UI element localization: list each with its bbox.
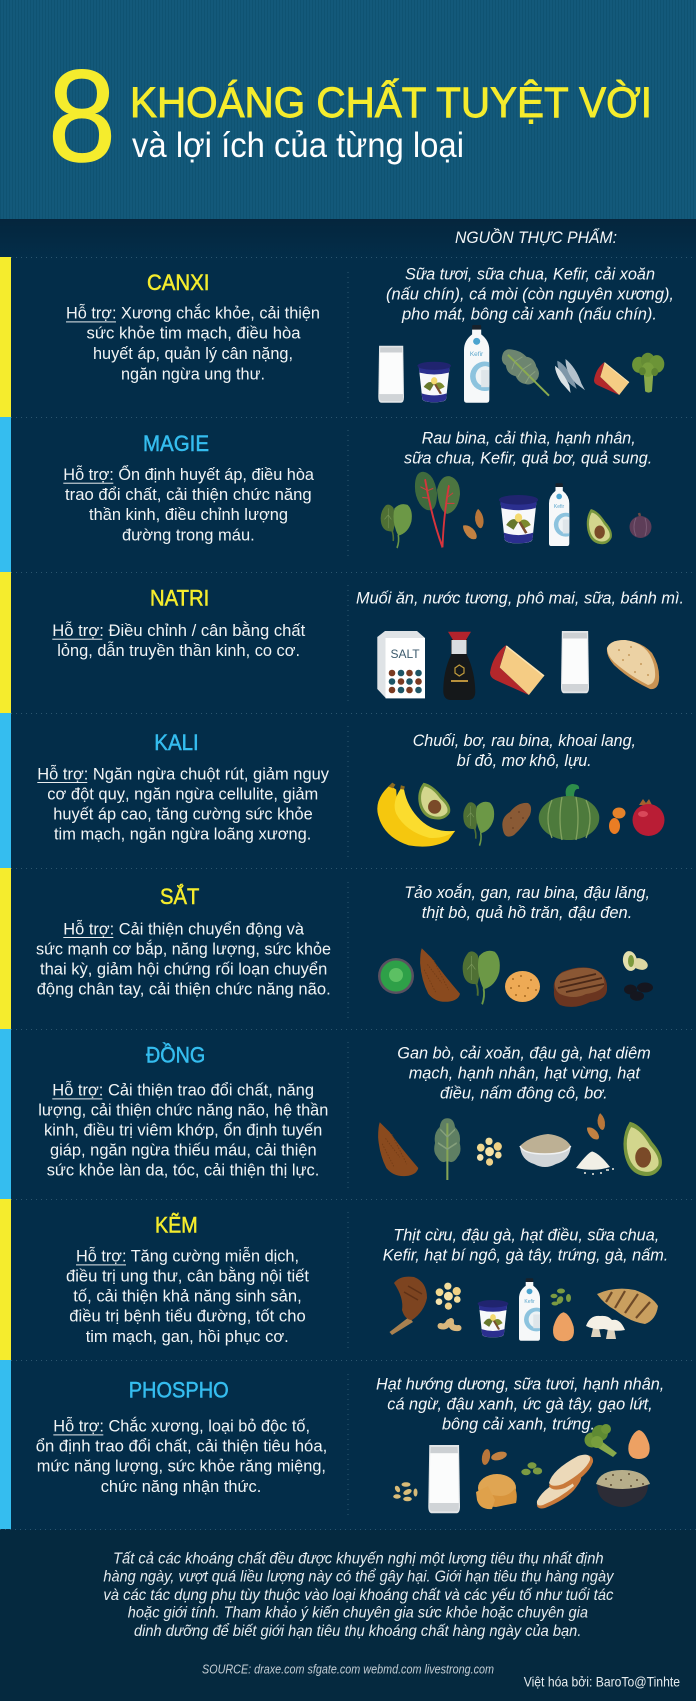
icon: grilled turkey: [597, 1289, 658, 1324]
icon: avocado: [418, 783, 450, 820]
food list: [376, 1374, 664, 1433]
benefits text: tim mạch, gan, hồi phục cơ.: [86, 1327, 289, 1346]
panel: phospho: [0, 1360, 696, 1529]
icon: chickpeas: [477, 1138, 502, 1166]
icon: kale: [502, 349, 549, 396]
benefits text: huyết áp, quản lý cân nặng,: [93, 344, 293, 363]
benefits text: [37, 764, 329, 844]
disclaimer text: [103, 1550, 614, 1640]
icon: kefir: Kefir: [554, 504, 564, 510]
icon: mushrooms: [586, 1316, 625, 1339]
heading: magie: MAGIE: [143, 431, 209, 456]
icon: pumpkin seeds: [550, 1288, 571, 1306]
food list: mạch, hạnh nhân, hạt vừng, hạt: [409, 1063, 641, 1082]
panel: kem: [0, 1199, 696, 1360]
benefits text: [38, 1081, 328, 1179]
panel: canxi: [0, 257, 696, 417]
food list: Muối ăn, nước tương, phô mai, sữa, bánh mì.: [356, 588, 684, 607]
benefits text: [66, 1247, 309, 1346]
icon: yogurt: [499, 495, 538, 543]
title: KHOÁNG CHẤT TUYỆT VỜI: [130, 79, 652, 127]
icon: almonds: [587, 1113, 605, 1140]
icon: sesame seeds: [576, 1152, 614, 1174]
icon: kale: [434, 1118, 461, 1180]
heading: kali: KALI: [154, 730, 199, 755]
food list: [404, 428, 652, 467]
icon: cheese: [490, 645, 544, 695]
benefits text: chức năng nhận thức.: [101, 1477, 261, 1496]
food list: [386, 264, 674, 324]
benefits text: điều trị ung thư, cân bằng nội tiết: [66, 1267, 309, 1286]
food list: Hạt hướng dương, sữa tươi, hạnh nhân,: [376, 1374, 664, 1393]
icon: almonds: [463, 509, 484, 539]
icon: pomegranate: [632, 799, 664, 836]
heading: sat: SẮT: [160, 884, 199, 909]
food list: [404, 883, 650, 922]
benefits text: Hỗ trợ: Xương chắc khỏe, cải thiện: [66, 304, 320, 323]
benefits text: tố, cải thiện khả năng sinh sản,: [73, 1287, 302, 1306]
icon: turkey slices: [537, 1455, 593, 1508]
benefits text: Hỗ trợ: Chắc xương, loại bỏ độc tố,: [53, 1417, 310, 1436]
benefits text: sức mạnh cơ bắp, năng lượng, sức khỏe: [36, 939, 331, 958]
disclaimer text: dinh dưỡng để biết giới hạn tiêu thụ khoáng chất hàng ngày của bạn.: [134, 1622, 581, 1640]
benefits text: giáp, ngăn ngừa thiếu máu, cải thiện: [50, 1141, 317, 1160]
food list: cá ngừ, đậu xanh, ức gà tây, gạo lứt,: [387, 1394, 653, 1413]
benefits text: ổn định trao đổi chất, cải thiện tiêu hóa,: [36, 1437, 327, 1456]
panel: magie: [0, 417, 696, 572]
benefits text: Hỗ trợ: Tăng cường miễn dịch,: [76, 1247, 299, 1266]
icon: spirulina: [378, 958, 414, 994]
benefits text: lỏng, dẫn truyền thần kinh, co cơ.: [57, 641, 300, 660]
title: và lợi ích của từng loại: [132, 126, 464, 165]
icon: kefir: Kefir: [524, 1299, 535, 1305]
icon: steak: [554, 967, 607, 1007]
benefits text: ngăn ngừa ung thư.: [121, 364, 265, 383]
icon: kefir: [549, 483, 577, 546]
disclaimer text: hàng ngày, vượt quá liều lượng này có thể gây hại. Giới hạn tiêu thụ hàng ngày: [103, 1568, 614, 1586]
icon: green beans: [521, 1462, 542, 1475]
icon: lentils: [505, 971, 540, 1002]
icon: kefir: [519, 1278, 548, 1341]
heading: natri: NATRI: [150, 585, 209, 610]
heading: phospho: PHOSPHO: [129, 1377, 229, 1402]
icon: lamb: [390, 1277, 427, 1335]
benefits text: [63, 465, 315, 544]
icon: spinach: [463, 951, 500, 1004]
benefits text: [66, 304, 320, 383]
benefits text: động chân tay, cải thiện chức năng não.: [37, 980, 331, 999]
icon: avocado: [623, 1122, 662, 1176]
panel: natri: [0, 572, 696, 714]
food list: [383, 1226, 668, 1265]
benefits text: Hỗ trợ: Điều chỉnh / cân bằng chất: [52, 621, 306, 640]
benefits text: tim mạch, ngăn ngừa loãng xương.: [54, 825, 311, 844]
benefits text: huyết áp cao, tăng cường sức khỏe: [53, 804, 313, 823]
icon: chard: [415, 472, 460, 547]
food list: (nấu chín), cá mòi (còn nguyên xương),: [386, 284, 674, 304]
icon: cashews: [440, 1321, 458, 1328]
icon: spinach: [463, 802, 494, 846]
benefits text: sức khỏe làn da, tóc, cải thiện thị lực.: [47, 1160, 319, 1179]
panel: kali: [0, 713, 664, 868]
benefits text: sức khỏe tim mạch, điều hòa: [86, 324, 301, 343]
disclaimer text: Tất cả các khoáng chất đều được khuyến nghị một lượng tiêu thụ nhất định: [113, 1550, 604, 1567]
icon: cheese wheel: [476, 1474, 517, 1509]
benefits text: kinh, điều trị viêm khớp, ổn định tuyến: [44, 1121, 322, 1140]
icon: sunflower seeds: [393, 1482, 418, 1501]
food list: [413, 731, 636, 770]
benefits text: trao đổi chất, cải thiện chức năng: [65, 485, 312, 504]
source line: SOURCE: draxe.com sfgate.com webmd.com livestrong.com: [202, 1661, 494, 1676]
icon: brown rice bowl: [596, 1470, 650, 1507]
icon: pumpkin: [539, 784, 599, 840]
disclaimer text: và các tác dụng phụ tùy thuộc vào loại khoáng chất và các yếu tố như tuổi tác: [103, 1586, 613, 1604]
icon: avocado: [587, 509, 612, 544]
icon: kefir: Kefir: [470, 351, 484, 358]
icon: pistachios: [621, 950, 649, 972]
benefits text: thần kinh, điều chỉnh lượng: [89, 505, 288, 524]
panel: dong: [0, 1029, 696, 1199]
benefits text: [36, 1417, 327, 1496]
footer panel: [0, 1530, 696, 1701]
top band: [0, 219, 696, 257]
food list: Tảo xoắn, gan, rau bina, đậu lăng,: [404, 883, 650, 902]
food list: thịt bò, quả hồ trăn, đậu đen.: [422, 903, 632, 922]
icon: dried apricots: [609, 808, 626, 834]
icon: broccoli: [584, 1424, 617, 1457]
benefits text: mức năng lượng, sức khỏe răng miệng,: [37, 1457, 326, 1476]
icon: milk: [561, 631, 589, 693]
food list: bí đỏ, mơ khô, lựu.: [457, 751, 592, 770]
benefits text: Hỗ trợ: Ổn định huyết áp, điều hòa: [63, 465, 315, 484]
icon: fig: [630, 513, 652, 538]
icon: cheese: [594, 362, 629, 395]
heading: kem: KẼM: [155, 1213, 198, 1238]
panel: sat: [0, 868, 696, 1029]
disclaimer text: hoặc giới tính. Tham khảo ý kiến chuyên gia sức khỏe hoặc chuyên gia: [128, 1605, 588, 1622]
benefits text: [36, 919, 331, 999]
icon: egg: [553, 1312, 574, 1341]
icon: milk: [428, 1445, 460, 1513]
icon: sardines: [555, 359, 585, 393]
icon: sweet potato: [502, 803, 531, 837]
title: 8: [48, 42, 116, 189]
benefits text: Hỗ trợ: Cải thiện chuyển động và: [63, 919, 305, 938]
icon: broccoli: [632, 353, 664, 393]
food list: pho mát, bông cải xanh (nấu chín).: [401, 304, 657, 324]
icon: bananas: [377, 783, 455, 847]
benefits text: lượng, cải thiện chức năng não, hệ thần: [38, 1101, 328, 1120]
icon: milk: [378, 346, 404, 403]
benefits text: thai kỳ, giảm hội chứng rối loạn chuyển: [40, 959, 327, 978]
benefits text: Hỗ trợ: Ngăn ngừa chuột rút, giảm nguy: [37, 764, 329, 783]
food list: Gan bò, cải xoăn, đậu gà, hạt diêm: [397, 1043, 651, 1062]
icon: kefir: [464, 325, 499, 403]
food list: Sữa tươi, sữa chua, Kefir, cải xoăn: [405, 264, 655, 284]
icon: liver: [420, 948, 460, 1002]
benefits text: đường trong máu.: [122, 525, 255, 544]
food list: Kefir, hạt bí ngô, gà tây, trứng, gà, nấm.: [383, 1246, 668, 1265]
food list: Rau bina, cải thìa, hạnh nhân,: [422, 428, 636, 447]
benefits text: [52, 621, 306, 660]
icon: almonds: [481, 1448, 508, 1466]
icon: egg: [628, 1430, 650, 1459]
food list: bông cải xanh, trứng.: [442, 1414, 595, 1433]
benefits text: điều trị bệnh tiểu đường, tốt cho: [69, 1307, 306, 1326]
icon: chickpeas: [436, 1283, 461, 1310]
icon: black beans: [624, 982, 653, 1001]
icon: yogurt: [417, 362, 451, 402]
icon: bread: [607, 640, 659, 689]
icon: soy sauce bottle: [443, 632, 475, 700]
benefits text: Hỗ trợ: Cải thiện trao đổi chất, năng: [52, 1081, 314, 1100]
food list: Thịt cừu, đậu gà, hạt điều, sữa chua,: [393, 1226, 659, 1245]
food list: điều, nấm đông cô, bơ.: [440, 1083, 608, 1102]
food list: [397, 1043, 651, 1102]
food list: sữa chua, Kefir, quả bơ, quả sung.: [404, 448, 652, 467]
heading: canxi: CANXI: [147, 270, 210, 295]
icon: spinach: [381, 504, 412, 548]
icon: oat bowl: [520, 1134, 571, 1167]
food list: Chuối, bơ, rau bina, khoai lang,: [413, 731, 636, 750]
header band: [0, 0, 696, 219]
icon: yogurt: [478, 1300, 508, 1337]
column heading: food sources: NGUỒN THỰC PHẨM:: [455, 228, 617, 247]
benefits text: cơ đột quỵ, ngăn ngừa cellulite, giảm: [47, 784, 318, 803]
icon: salt box: SALT: [390, 647, 420, 661]
heading: dong: ĐỒNG: [146, 1043, 205, 1068]
icon: liver: [378, 1122, 418, 1176]
icon: salt box: [377, 631, 425, 698]
title: [48, 42, 652, 189]
